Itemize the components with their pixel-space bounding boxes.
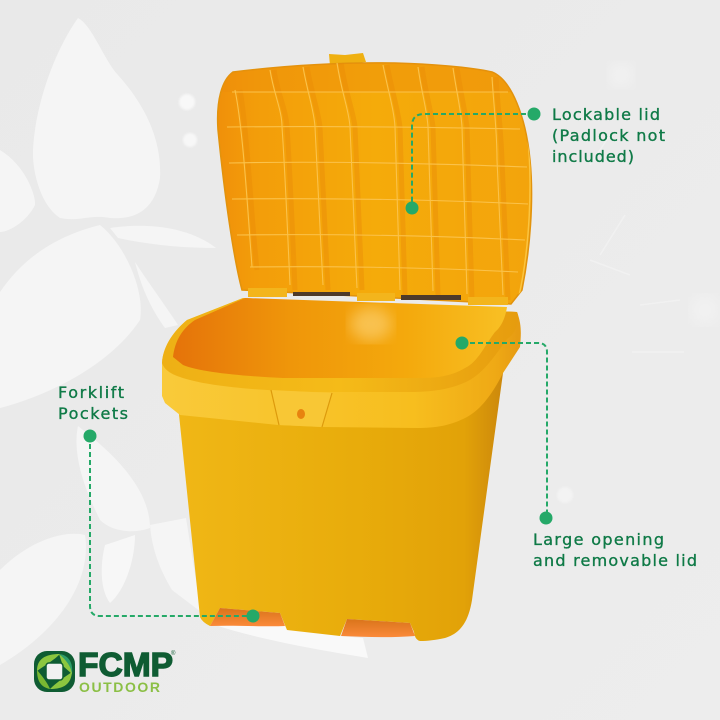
interior highlight (350, 307, 392, 341)
forklift label (58, 383, 128, 423)
lockable lid label: (Padlock not (552, 126, 665, 145)
callout: forklift pockets (58, 383, 260, 622)
bin body (178, 373, 503, 641)
forklift leader (90, 436, 253, 616)
large opening label (533, 530, 697, 570)
lid cell shading (215, 60, 535, 300)
large opening label: Large opening (533, 530, 664, 549)
open lid (215, 60, 535, 304)
logo registered mark: ® (171, 650, 176, 657)
lid grid lines (227, 63, 528, 295)
lid tab (329, 53, 366, 66)
lockable lid label: Lockable lid (552, 105, 660, 124)
large opening label: and removable lid (533, 551, 697, 570)
callout: large opening (456, 336, 697, 570)
large opening leader (462, 343, 547, 518)
logo wordmark: FCMP (78, 646, 173, 683)
forklift notches (210, 608, 415, 637)
bin interior opening (173, 298, 507, 378)
callout: lockable lid (406, 105, 665, 214)
lockable lid leader (412, 114, 534, 208)
icon: leaf ring (34, 651, 75, 692)
bin rim (162, 298, 521, 428)
rim lip (162, 298, 518, 392)
logo subline: OUTDOOR (79, 679, 160, 695)
logo (34, 646, 176, 695)
forklift label: Forklift (58, 383, 124, 402)
lockable lid label: included) (552, 147, 634, 166)
forklift label: Pockets (58, 404, 128, 423)
lid hinges (248, 288, 508, 305)
rim latch (271, 390, 332, 427)
storage bin (162, 53, 535, 641)
lockable lid label (552, 105, 665, 166)
